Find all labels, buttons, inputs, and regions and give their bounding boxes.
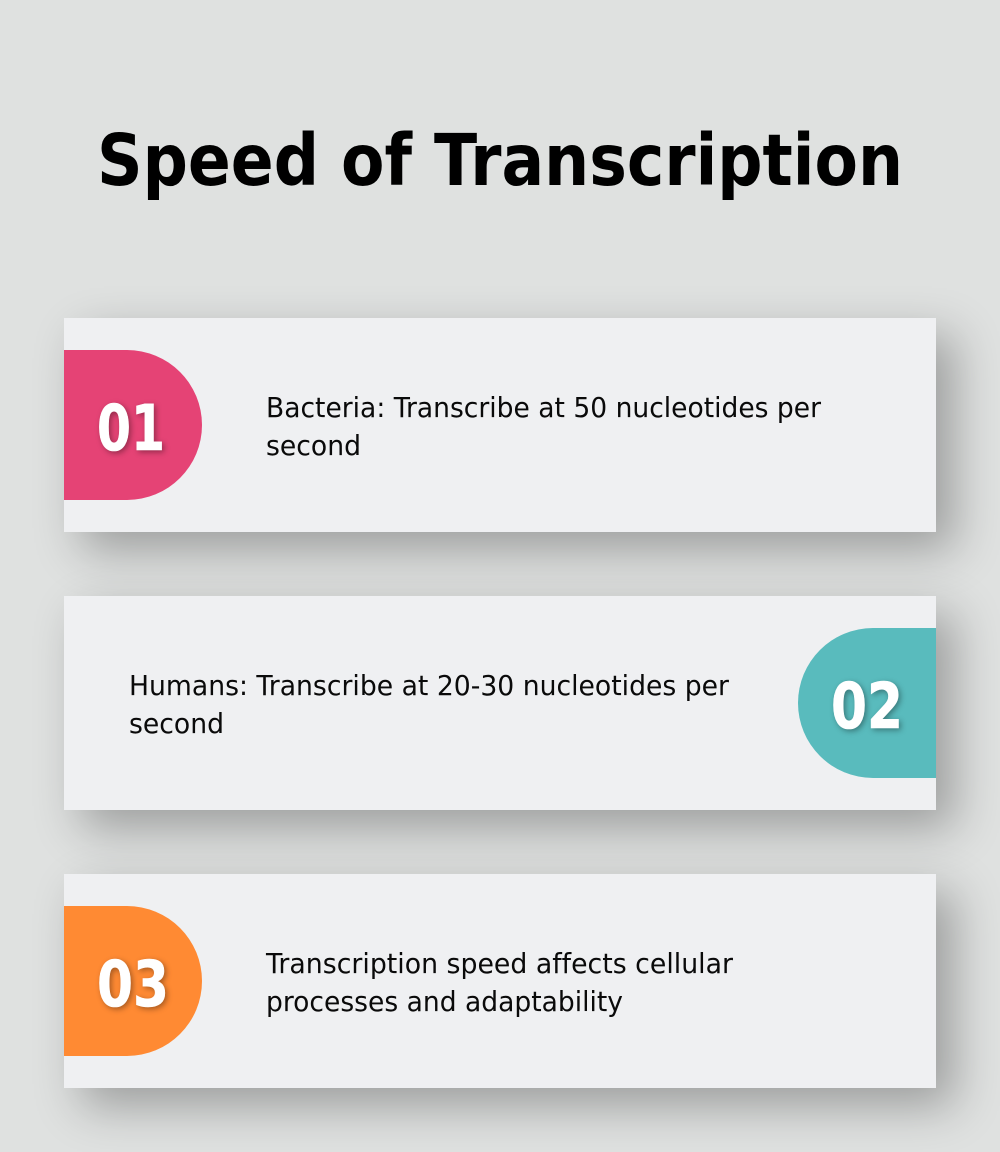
text: humans speed	[129, 670, 730, 740]
text: humans speed: Humans: Transcribe at 20-30 nucleotides per	[129, 670, 730, 702]
badge: 02	[798, 628, 936, 778]
text: bacteria speed: Bacteria: Transcribe at 50 nucleotides per	[266, 392, 822, 424]
text: bacteria speed: second	[266, 430, 361, 462]
badge: 01	[64, 350, 202, 500]
text: speed effects: Transcription speed affects cellular	[265, 948, 734, 980]
panel: step 03 effects	[64, 874, 936, 1088]
text: bacteria speed	[266, 392, 822, 462]
panel: step 01 bacteria	[64, 318, 936, 532]
text: humans speed: second	[129, 708, 224, 740]
text: speed effects	[265, 948, 734, 1018]
badge: 02: 02	[831, 670, 903, 743]
title: Speed of Transcription	[97, 119, 903, 202]
badge: 01: 01	[97, 392, 165, 465]
text: speed effects: processes and adaptability	[266, 986, 623, 1018]
badge: 03: 03	[97, 948, 169, 1021]
panel: step 02 humans	[64, 596, 936, 810]
badge: 03	[64, 906, 202, 1056]
